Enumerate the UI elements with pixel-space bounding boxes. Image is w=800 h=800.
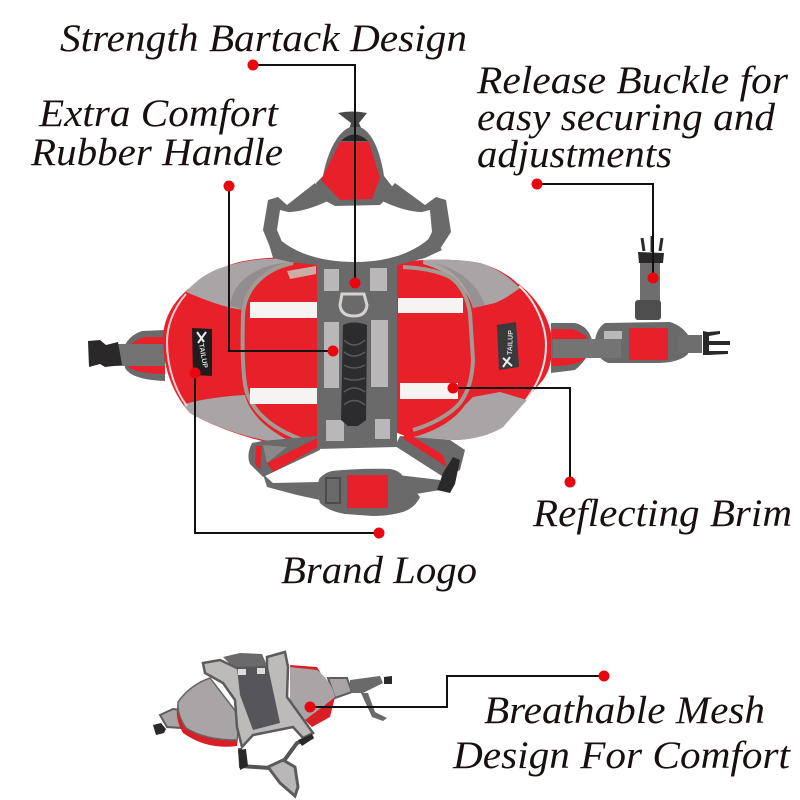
left shoulder strap — [263, 183, 330, 252]
leader line: logo — [195, 373, 379, 533]
marker dots: mesh — [304, 670, 610, 712]
leader line: brim — [453, 388, 570, 482]
callout text: mesh: Design For Comfort — [452, 734, 791, 777]
brand tag: TAILUP — [197, 343, 208, 369]
center back pad — [223, 653, 268, 670]
left saddle bag — [163, 257, 320, 447]
side release buckle — [703, 331, 730, 355]
top handle triangle — [316, 112, 395, 206]
callout: Extra Comfort Rubber Handle — [30, 92, 338, 356]
marker dots: buckle — [532, 178, 658, 284]
callout text: buckle: easy securing and — [477, 96, 776, 139]
leader line: handle — [229, 186, 333, 351]
callout text: logo: Brand Logo — [281, 549, 477, 592]
callout: Release Buckle — [476, 59, 789, 284]
main product: dog saddle bag harness — [88, 112, 730, 516]
callout: Breathable Mesh — [304, 670, 791, 777]
D-ring — [340, 294, 367, 316]
bottom chest strap — [240, 737, 313, 768]
marker dots: logo — [190, 368, 384, 538]
callout text: strength: Strength Bartack Design — [60, 17, 467, 60]
brand tag: TAILUP — [507, 330, 515, 355]
callout text: brim: Reflecting Brim — [532, 492, 792, 535]
grey mesh bags — [178, 678, 240, 740]
marker dots: strength — [248, 60, 360, 288]
brand tag — [192, 328, 212, 376]
callout: Brand Logo — [190, 368, 477, 592]
leader line: strength — [253, 65, 355, 283]
callout text: handle: Extra Comfort — [38, 92, 279, 135]
callout text: mesh: Breathable Mesh — [484, 689, 765, 732]
red bag edges — [177, 678, 240, 747]
callout text: handle: Rubber Handle — [30, 131, 283, 174]
marker dots: brim — [448, 382, 576, 488]
right side strap and pad — [551, 322, 730, 373]
leader line: mesh — [310, 676, 604, 707]
rubber handle — [341, 322, 367, 426]
right shoulder strap — [380, 183, 451, 252]
right saddle bag — [395, 260, 552, 440]
leader line: buckle — [537, 184, 653, 278]
marker dots: handle — [224, 180, 338, 356]
central harness panel — [267, 236, 442, 449]
callout text: buckle: Release Buckle for — [476, 59, 789, 102]
callout text: buckle: adjustments — [477, 133, 672, 176]
vertical release buckle strap — [635, 236, 664, 320]
side pads — [328, 678, 352, 698]
lower flaps under the bags — [248, 433, 465, 478]
brand tag — [497, 322, 519, 370]
callout: Strength Bartack Design — [60, 17, 467, 288]
left side strap with buckle — [88, 330, 165, 381]
small product: breathable mesh underside — [153, 652, 392, 796]
chest strap and pad — [263, 457, 460, 516]
callout: Reflecting Brim — [448, 382, 792, 535]
